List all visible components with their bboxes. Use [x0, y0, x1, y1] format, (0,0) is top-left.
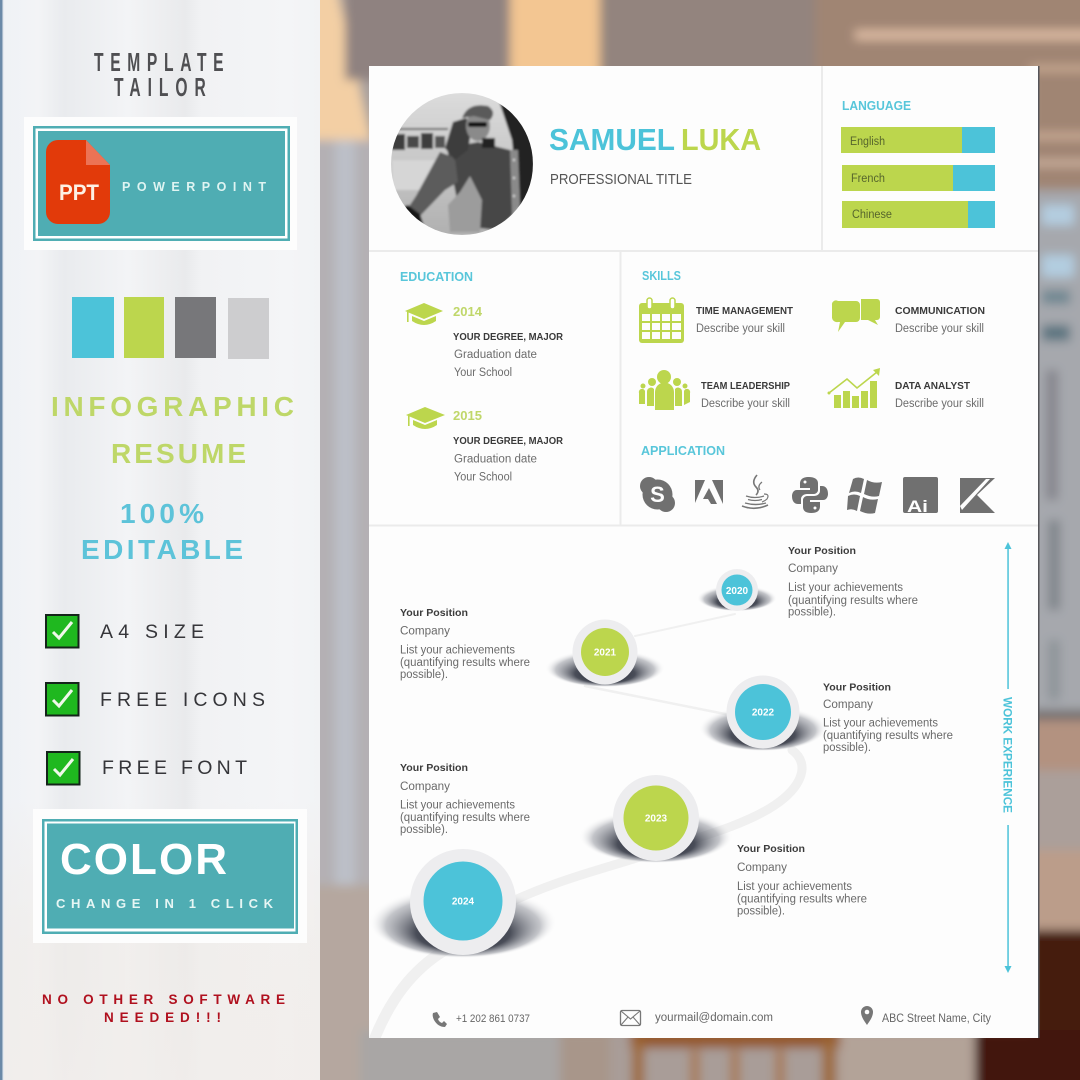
skills section [639, 269, 985, 410]
education entry 2015: 2015 [453, 408, 482, 423]
job entry 2020 [788, 545, 918, 618]
icon: calendar [639, 298, 684, 343]
icon: skype [640, 477, 675, 512]
name: SAMUEL [549, 122, 675, 157]
icon: chat bubbles [832, 298, 880, 332]
job entry 2022: possible). [823, 742, 871, 754]
skill: communication: COMMUNICATION [895, 306, 985, 317]
brand name: TAILOR [114, 73, 206, 102]
colour swatches [72, 297, 269, 359]
education entry 2014: 2014 [453, 304, 483, 319]
skill: time management: Describe your skill [696, 323, 785, 335]
node 2024: 2024 [452, 896, 475, 908]
icon: team [639, 370, 690, 410]
heading: 100% editable: EDITABLE [81, 534, 243, 565]
winding path [374, 614, 802, 1040]
icon: illustrator [903, 477, 938, 516]
skill: time management: TIME MANAGEMENT [696, 306, 793, 317]
resume sheet [369, 66, 1040, 1040]
feature: free font [47, 752, 247, 784]
education section [400, 270, 564, 484]
job entry 2020: (quantifying results where [788, 595, 918, 607]
feature: a4 size: A4 SIZE [100, 621, 204, 643]
job entry 2024: Your Position [737, 843, 805, 855]
education entry 2015: Your School [454, 472, 512, 484]
name: LUKA [681, 122, 761, 157]
education entry 2014 [405, 303, 564, 379]
colour badge: CHANGE IN 1 CLICK [56, 896, 274, 911]
job entry 2021 [400, 607, 530, 681]
icon: ppt file [46, 140, 110, 224]
job entry 2023: Your Position [400, 762, 468, 774]
work experience timeline [369, 542, 1012, 1040]
job entry 2023 [400, 762, 530, 836]
blurred room background [300, 0, 1080, 1080]
colour badge [33, 809, 307, 943]
node 2020: 2020 [726, 586, 749, 597]
language section: LANGUAGE [842, 99, 911, 113]
bar: french: French [851, 173, 885, 185]
heading: infographic resume [51, 391, 294, 469]
job entry 2022: (quantifying results where [823, 730, 953, 742]
job entry 2020: Company [788, 563, 838, 575]
node 2023: 2023 [645, 814, 668, 824]
skill: team leadership: TEAM LEADERSHIP [701, 381, 790, 392]
skill: data analyst: Describe your skill [895, 398, 984, 410]
left promo panel [0, 0, 320, 1080]
feature: free font: FREE FONT [102, 757, 247, 779]
job entry 2020: List your achievements [788, 582, 903, 594]
icon: growth chart [828, 368, 880, 408]
icon: python [792, 477, 828, 513]
job entry 2020: Your Position [788, 545, 856, 557]
language section [841, 99, 995, 228]
icon: graduation cap [405, 303, 443, 325]
education section: EDUCATION [400, 270, 473, 284]
job entry 2023: List your achievements [400, 800, 515, 812]
job entry 2023: possible). [400, 824, 448, 836]
skill: data analyst: DATA ANALYST [895, 381, 970, 392]
skill: time management [639, 298, 793, 343]
job entry 2024: (quantifying results where [737, 894, 867, 906]
icon: kotlin [960, 478, 995, 513]
heading: 100% editable: 100% [120, 498, 204, 529]
job entry 2024: Company [737, 862, 787, 874]
brand name: TEMPLATE [94, 48, 224, 77]
contact: email [620, 1010, 773, 1026]
icon: windows [847, 478, 882, 514]
education entry 2014: YOUR DEGREE, MAJOR [453, 332, 564, 343]
colour badge: COLOR [60, 835, 227, 884]
notice: no other software needed: NEEDED!!! [104, 1010, 221, 1025]
brand name [94, 48, 224, 102]
node 2024 [369, 849, 557, 958]
job entry 2022 [823, 682, 953, 754]
powerpoint badge [24, 117, 297, 250]
job entry 2024: possible). [737, 906, 785, 918]
heading: infographic resume: RESUME [111, 438, 246, 469]
job entry 2023: Company [400, 781, 450, 793]
education entry 2014: Graduation date [454, 349, 537, 361]
professional title: PROFESSIONAL TITLE [550, 172, 692, 188]
job entry 2024 [737, 843, 867, 918]
contact: phone [433, 1012, 530, 1027]
arrow: work experience axis: WORK EXPERIENCE [1000, 697, 1012, 813]
job entry 2023: (quantifying results where [400, 812, 530, 824]
powerpoint badge: POWERPOINT [122, 180, 266, 194]
contact footer [433, 1006, 991, 1027]
icon: ppt file: PPT [59, 180, 100, 205]
education entry 2015 [406, 407, 564, 484]
job entry 2022: Your Position [823, 682, 891, 694]
node 2023 [579, 775, 733, 863]
feature: free icons [46, 683, 265, 716]
node 2021 [545, 620, 665, 687]
skill: communication: Describe your skill [895, 323, 984, 335]
bar: english: English [850, 136, 885, 148]
feature: a4 size [46, 615, 204, 648]
notice: no other software needed: NO OTHER SOFTWARE [42, 992, 285, 1007]
job entry 2021: Company [400, 626, 450, 638]
notice: no other software needed [42, 992, 285, 1025]
heading: 100% editable [81, 498, 243, 565]
node 2022 [699, 676, 827, 751]
contact: address: ABC Street Name, City [882, 1013, 991, 1025]
job entry 2022: List your achievements [823, 718, 938, 730]
contact: phone: +1 202 861 0737 [456, 1013, 530, 1025]
contact: email: yourmail@domain.com [655, 1012, 773, 1024]
node 2021: 2021 [594, 648, 617, 658]
icon: graduation cap [406, 407, 445, 429]
job entry 2020: possible). [788, 606, 836, 618]
job entry 2021: List your achievements [400, 644, 515, 656]
job entry 2021: Your Position [400, 607, 468, 619]
name [549, 122, 761, 157]
profile photo [390, 92, 534, 236]
node 2022: 2022 [752, 708, 775, 718]
skill: data analyst [828, 368, 984, 410]
icon: illustrator: Ai [907, 497, 928, 516]
skill: communication [832, 298, 985, 335]
education entry 2014: Your School [454, 367, 512, 379]
job entry 2024: List your achievements [737, 881, 852, 893]
education entry 2015: Graduation date [454, 454, 537, 466]
bar: french [842, 165, 995, 191]
skills section: SKILLS [642, 269, 681, 283]
icon: java [742, 475, 768, 508]
bar: chinese [842, 201, 995, 228]
feature: free icons: FREE ICONS [100, 689, 265, 711]
job entry 2021: (quantifying results where [400, 657, 530, 669]
skill: team leadership: Describe your skill [701, 398, 790, 410]
skill: team leadership [639, 370, 790, 410]
node 2020 [697, 569, 777, 611]
arrow: work experience axis [1000, 542, 1012, 973]
education entry 2015: YOUR DEGREE, MAJOR [453, 436, 564, 447]
bar: chinese: Chinese [852, 209, 892, 221]
icon: adobe [695, 480, 723, 504]
icon: skype: S [650, 482, 665, 507]
bar: english [841, 127, 995, 153]
contact: address [861, 1006, 991, 1025]
job entry 2021: possible). [400, 669, 448, 681]
application section [640, 444, 995, 516]
job entry 2022: Company [823, 699, 873, 711]
heading: infographic resume: INFOGRAPHIC [51, 391, 294, 422]
application section: APPLICATION [641, 444, 725, 458]
